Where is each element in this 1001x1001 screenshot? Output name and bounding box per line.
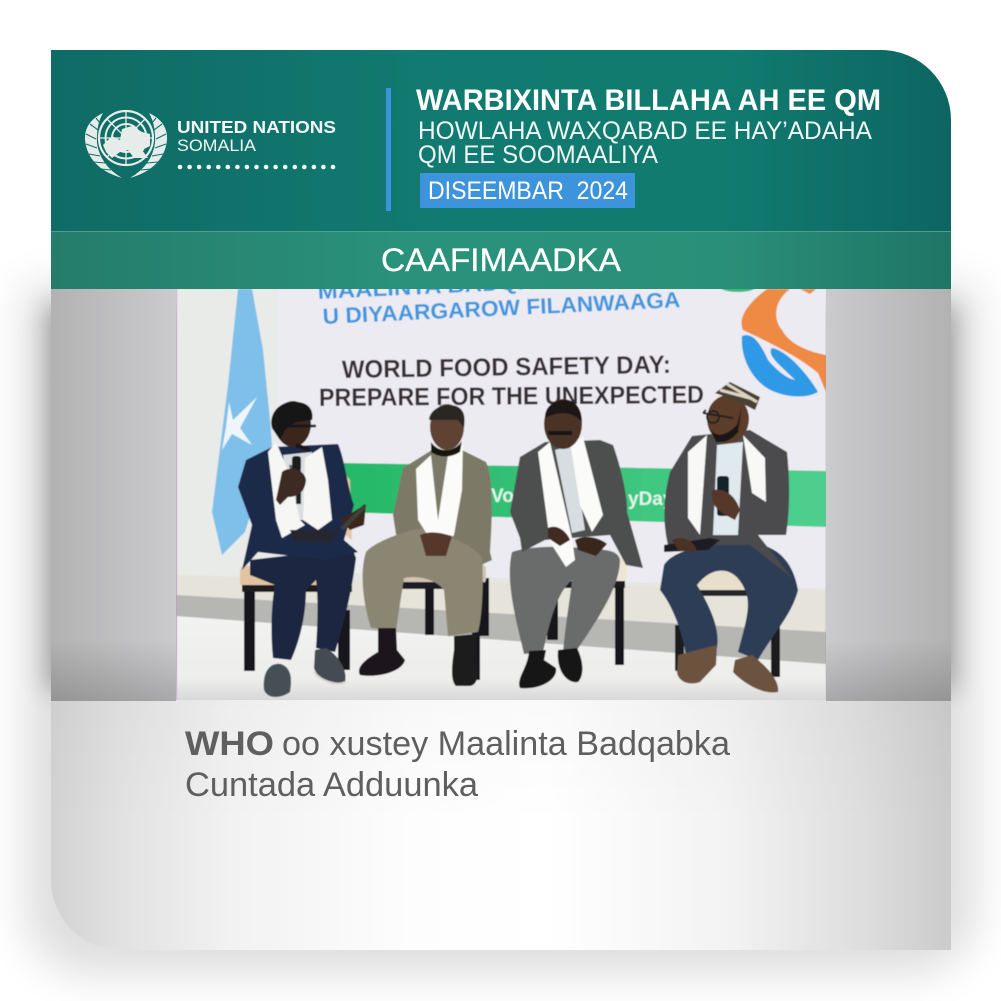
logo wordmark: UNITED NATIONS: [177, 117, 336, 137]
banner dark English text: PREPARE FOR THE UNEXPECTED: [319, 381, 704, 412]
chair 2: [394, 564, 489, 680]
left laurel: [85, 113, 122, 178]
report subtitle: [418, 117, 872, 169]
caption: [185, 725, 730, 804]
marble strip: [176, 595, 826, 664]
Somali flag: [212, 289, 272, 555]
skirting: [176, 575, 826, 634]
right side panel beside photo: [826, 289, 951, 701]
report subtitle: HOWLAHA WAXQABAD EE HAY’ADAHA: [418, 117, 872, 145]
report subtitle: QM EE SOOMAALIYA: [418, 141, 658, 169]
banner dark English text: WORLD FOOD SAFETY DAY:: [342, 351, 671, 384]
globe: [99, 111, 153, 165]
right laurel: [130, 113, 167, 178]
chair 4: [675, 568, 780, 677]
logo wordmark: SOMALIA: [177, 137, 256, 155]
person 3: man in grey suit looking down: [510, 399, 643, 688]
wall: [352, 572, 826, 590]
dotted rule: [178, 165, 335, 169]
banner hashtag text: [491, 486, 674, 510]
person 4: man with cap in grey jacket: [660, 382, 798, 693]
lower caption panel: [51, 700, 951, 950]
chair 3: [540, 558, 627, 665]
floor: [176, 612, 826, 702]
logo wordmark: [177, 117, 336, 169]
banner logo: [720, 282, 826, 396]
band title: CAAFIMAADKA: [381, 242, 622, 278]
photo: panel discussion: [176, 268, 826, 702]
caption: oo xustey Maalinta Badqabka: [282, 725, 730, 763]
banner blue Somali text: U DIYAARGAROW FILANWAAGA: [322, 287, 681, 329]
continents: [103, 126, 150, 158]
date badge: DISEEMBAR 2024: [428, 177, 628, 205]
report title: WARBIXINTA BILLAHA AH EE QM: [416, 84, 881, 117]
photo left edge line: [176, 289, 177, 700]
left side panel beside photo: [51, 289, 176, 701]
backdrop banner: [278, 289, 826, 589]
caption: WHO: [185, 725, 274, 763]
chair 1: [240, 466, 352, 671]
section band: [51, 231, 951, 289]
card shadow: [25, 285, 977, 975]
banner hashtag text: Vo: [491, 486, 514, 507]
banner dark English text: [320, 355, 704, 407]
caption: Cuntada Adduunka: [185, 766, 478, 804]
banner blue Somali text: MAALINTA BADQABKA: [317, 268, 588, 304]
UN emblem: [85, 111, 167, 178]
green band on banner: [338, 463, 826, 527]
header panel: [51, 50, 951, 232]
person 2: man in olive robe: [359, 404, 492, 686]
banner hashtag text: yDay: [628, 489, 674, 510]
person 1: presenter in navy suit: [238, 401, 366, 697]
header divider: [386, 88, 391, 211]
